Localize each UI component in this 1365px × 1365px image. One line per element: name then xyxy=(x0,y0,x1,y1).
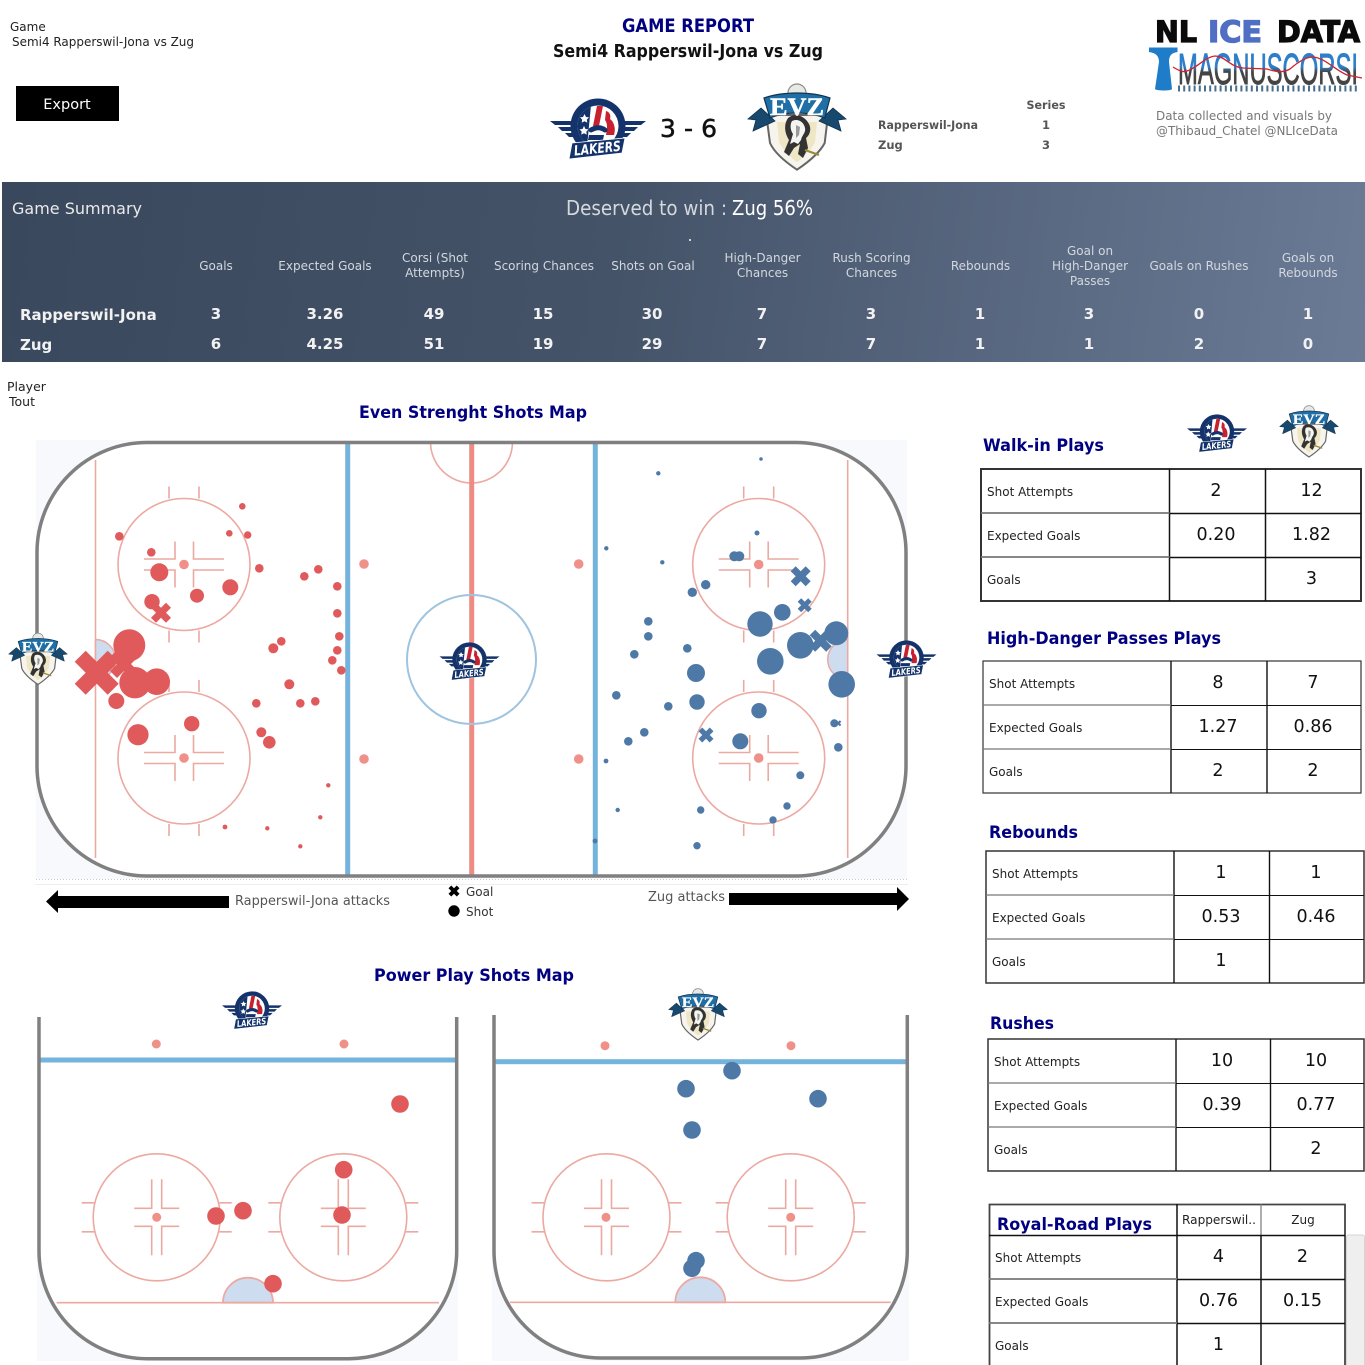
column headers: Goal on xyxy=(1067,244,1113,258)
icon: EVZ logo, power play xyxy=(669,989,727,1040)
column headers: Attempts) xyxy=(405,266,465,280)
chart: even strength rink xyxy=(9,401,937,884)
table: rushes xyxy=(988,1039,1364,1171)
row: Rapperswil-Jona: 7 xyxy=(757,305,767,323)
table: royal-road plays: Shot Attempts xyxy=(995,1251,1081,1265)
icon: Lakers logo, centre ice: LAKERS xyxy=(454,668,484,681)
shots: Rapperswil-Jona power play xyxy=(207,1095,409,1292)
row: Rapperswil-Jona: 1 xyxy=(1303,305,1313,323)
column headers: High-Danger xyxy=(1052,259,1128,273)
row: Zug: Zug xyxy=(20,336,52,354)
player filter: Player xyxy=(7,379,47,394)
chart: Zug power play rink xyxy=(492,989,909,1361)
icon: Lakers logo, table header: LAKERS xyxy=(1202,440,1232,453)
label: Rapperswil-Jona attacks: Rapperswil-Jona attacks xyxy=(235,894,390,909)
icon: Lakers logo, power play: LAKERS xyxy=(237,1017,267,1030)
table: rebounds: 1 xyxy=(1215,951,1227,971)
series table xyxy=(878,98,1066,152)
goals: Rapperswil-Jona even strength xyxy=(75,603,171,695)
row: Rapperswil-Jona: 15 xyxy=(533,305,553,323)
series table: Rapperswil-Jona xyxy=(878,118,978,132)
row: Zug: 1 xyxy=(975,335,985,353)
icon: Lakers logo, centre ice xyxy=(440,642,500,681)
table: walk-in plays: 1.82 xyxy=(1292,525,1331,545)
column headers: Chances xyxy=(846,266,897,280)
heading: rushes: Rushes xyxy=(990,1014,1054,1033)
table: high-danger passes plays: 0.86 xyxy=(1294,717,1332,737)
table: walk-in plays xyxy=(981,469,1361,601)
chart: Rapperswil-Jona power play rink xyxy=(37,991,458,1361)
row: Rapperswil-Jona: 3 xyxy=(1084,305,1094,323)
icon: EVZ logo, header xyxy=(748,84,846,170)
column headers: Goals on Rushes xyxy=(1149,259,1249,273)
table: high-danger passes plays: Goals xyxy=(989,765,1023,779)
export button xyxy=(16,86,119,121)
table: rebounds: Expected Goals xyxy=(992,911,1085,925)
heading: royal-road plays: Royal-Road Plays xyxy=(997,1215,1152,1234)
row: Zug: 7 xyxy=(866,335,876,353)
label: Zug attacks: Zug attacks xyxy=(648,890,725,905)
table: rebounds: 1 xyxy=(1310,863,1322,883)
row: Zug xyxy=(20,335,1313,354)
icon: EVZ logo, header: EVZ xyxy=(770,94,824,121)
icon: Lakers logo, power play xyxy=(222,991,282,1030)
table: royal-road plays: 0.15 xyxy=(1283,1291,1322,1311)
title: game report: GAME REPORT xyxy=(622,15,754,37)
series table: 1 xyxy=(1042,118,1050,132)
row: Rapperswil-Jona: 49 xyxy=(424,305,444,323)
table: royal-road plays: 4 xyxy=(1213,1247,1224,1267)
heading: high-danger passes plays: High-Danger Passes Plays xyxy=(987,629,1221,648)
row: Rapperswil-Jona: 3 xyxy=(211,305,221,323)
icon: Lakers logo, header: LAKERS xyxy=(573,139,622,160)
header: game filter: Semi4 Rapperswil-Jona vs Zug xyxy=(12,35,194,49)
column headers: High-Danger xyxy=(724,251,801,265)
table: rushes: Expected Goals xyxy=(994,1099,1087,1113)
row: Zug: 19 xyxy=(533,335,553,353)
row: Zug: 1 xyxy=(1084,335,1094,353)
table: royal-road plays: 0.76 xyxy=(1199,1291,1238,1311)
goals: Zug even strength xyxy=(698,566,841,742)
table: royal-road plays: 2 xyxy=(1297,1247,1308,1267)
table: high-danger passes plays: 2 xyxy=(1212,761,1224,781)
shots: Rapperswil-Jona even strength xyxy=(108,503,346,848)
logo: NL Ice Data / Magnus Corsi: DATA xyxy=(1277,15,1361,49)
table: rushes: 2 xyxy=(1310,1139,1322,1159)
table: rushes: 0.77 xyxy=(1297,1095,1335,1115)
header: game filter xyxy=(10,20,194,49)
column headers: Passes xyxy=(1070,274,1110,288)
series table: Zug xyxy=(878,138,903,152)
icon: Lakers logo, right goal: LAKERS xyxy=(891,666,921,679)
table: high-danger passes plays: 8 xyxy=(1212,673,1224,693)
scrollbar xyxy=(1346,1235,1364,1365)
icon: EVZ logo, power play: EVZ xyxy=(682,995,714,1011)
table: royal-road plays: Zug xyxy=(1291,1213,1315,1227)
table: high-danger passes plays: 2 xyxy=(1307,761,1319,781)
table: walk-in plays: 3 xyxy=(1306,569,1317,589)
table: rushes: 10 xyxy=(1211,1051,1233,1071)
table: royal-road plays xyxy=(989,1204,1345,1365)
icon: EVZ logo, table header xyxy=(1280,406,1338,457)
table: royal-road plays: Expected Goals xyxy=(995,1295,1088,1309)
legend: goal and shot xyxy=(448,885,494,919)
icon: Lakers logo, header xyxy=(550,98,646,160)
column headers: Rebounds xyxy=(951,259,1010,273)
column headers xyxy=(199,244,1338,288)
table: royal-road plays: 1 xyxy=(1213,1335,1224,1355)
row: Zug: 29 xyxy=(642,335,662,353)
heading: walk-in plays: Walk-in Plays xyxy=(983,436,1104,455)
row: Zug: 51 xyxy=(424,335,444,353)
player filter: Tout xyxy=(8,394,35,409)
table: rushes: 10 xyxy=(1305,1051,1327,1071)
table: walk-in plays: Shot Attempts xyxy=(987,485,1073,499)
logo: NL Ice Data / Magnus Corsi xyxy=(1149,15,1362,94)
column headers: Rush Scoring xyxy=(832,251,911,265)
panel: game summary xyxy=(2,182,1365,362)
row: Zug: 4.25 xyxy=(306,335,344,353)
icon: EVZ logo, left goal xyxy=(9,633,67,685)
row: Zug: 6 xyxy=(211,335,221,353)
table: high-danger passes plays: Shot Attempts xyxy=(989,677,1075,691)
row: Rapperswil-Jona: 3.26 xyxy=(306,305,344,323)
table: high-danger passes plays: 1.27 xyxy=(1199,717,1237,737)
credits: @Thibaud_Chatel @NLIceData xyxy=(1156,123,1338,138)
legend: goal and shot: Goal xyxy=(466,885,493,899)
credits xyxy=(1156,108,1338,138)
subtitle: matchup: Semi4 Rapperswil-Jona vs Zug xyxy=(553,41,823,62)
column headers: Scoring Chances xyxy=(494,259,594,273)
column headers: Shots on Goal xyxy=(611,259,695,273)
table: rebounds: Goals xyxy=(992,955,1026,969)
table: rebounds: 1 xyxy=(1215,863,1227,883)
table: royal-road plays: Rapperswil.. xyxy=(1182,1213,1256,1227)
row: Zug: 7 xyxy=(757,335,767,353)
logo: NL Ice Data / Magnus Corsi: ICE xyxy=(1208,15,1262,49)
table: walk-in plays: 0.20 xyxy=(1197,525,1235,545)
table: rushes: 0.39 xyxy=(1203,1095,1241,1115)
row: Zug: 0 xyxy=(1303,335,1313,353)
row: Rapperswil-Jona: 3 xyxy=(866,305,876,323)
series table: Series xyxy=(1026,98,1066,112)
row: Rapperswil-Jona xyxy=(20,305,1313,324)
table: high-danger passes plays xyxy=(983,661,1361,793)
arrow: Rapperswil-Jona attacks xyxy=(46,890,229,913)
shots: Zug even strength xyxy=(593,457,855,849)
table: high-danger passes plays: Expected Goals xyxy=(989,721,1082,735)
column headers: Rebounds xyxy=(1278,266,1338,280)
arrow: Zug attacks xyxy=(729,887,909,911)
column headers: Chances xyxy=(737,266,788,280)
logo: NL Ice Data / Magnus Corsi: NL xyxy=(1155,15,1197,49)
credits: Data collected and visuals by xyxy=(1156,108,1333,123)
row: Rapperswil-Jona: Rapperswil-Jona xyxy=(20,306,157,324)
final score: 3 - 6 xyxy=(660,114,717,143)
series table: 3 xyxy=(1042,138,1050,152)
table: walk-in plays: Goals xyxy=(987,573,1021,587)
headline: deserved to win: Deserved to win : xyxy=(566,196,727,220)
table: rushes: Goals xyxy=(994,1143,1028,1157)
row: Zug: 2 xyxy=(1194,335,1204,353)
column headers: Goals xyxy=(199,259,233,273)
table: rebounds: 0.46 xyxy=(1297,907,1335,927)
heading: rebounds: Rebounds xyxy=(989,823,1078,842)
row: Rapperswil-Jona: 0 xyxy=(1194,305,1204,323)
icon: EVZ logo, table header: EVZ xyxy=(1293,412,1325,428)
column headers: Expected Goals xyxy=(278,259,372,273)
table: walk-in plays: Expected Goals xyxy=(987,529,1080,543)
heading: game summary: Game Summary xyxy=(12,199,142,218)
player filter xyxy=(7,379,47,409)
heading: even strength shots map: Even Strenght Shots Map xyxy=(359,403,587,422)
table: walk-in plays: 12 xyxy=(1300,481,1323,501)
legend: goal and shot: Shot xyxy=(466,905,494,919)
heading: power play shots map: Power Play Shots Map xyxy=(374,966,574,985)
table: high-danger passes plays: 7 xyxy=(1307,673,1319,693)
shots: Zug power play xyxy=(677,1062,827,1277)
table: rushes: Shot Attempts xyxy=(994,1055,1080,1069)
table: rebounds xyxy=(986,851,1364,983)
column headers: Corsi (Shot xyxy=(402,251,468,265)
column headers: Goals on xyxy=(1282,251,1334,265)
icon: Lakers logo, right goal xyxy=(876,640,936,679)
icon: EVZ logo, left goal: EVZ xyxy=(22,640,54,656)
header: game filter: Game xyxy=(10,20,46,34)
table: royal-road plays: Goals xyxy=(995,1339,1029,1353)
table: rebounds: Shot Attempts xyxy=(992,867,1078,881)
row: Rapperswil-Jona: 30 xyxy=(642,305,662,323)
table: rebounds: 0.53 xyxy=(1202,907,1240,927)
table: walk-in plays: 2 xyxy=(1210,481,1222,501)
icon: Lakers logo, table header xyxy=(1187,414,1247,453)
row: Rapperswil-Jona: 1 xyxy=(975,305,985,323)
export button: Export xyxy=(43,97,91,113)
headline: deserved to win: Zug 56% xyxy=(732,196,813,220)
